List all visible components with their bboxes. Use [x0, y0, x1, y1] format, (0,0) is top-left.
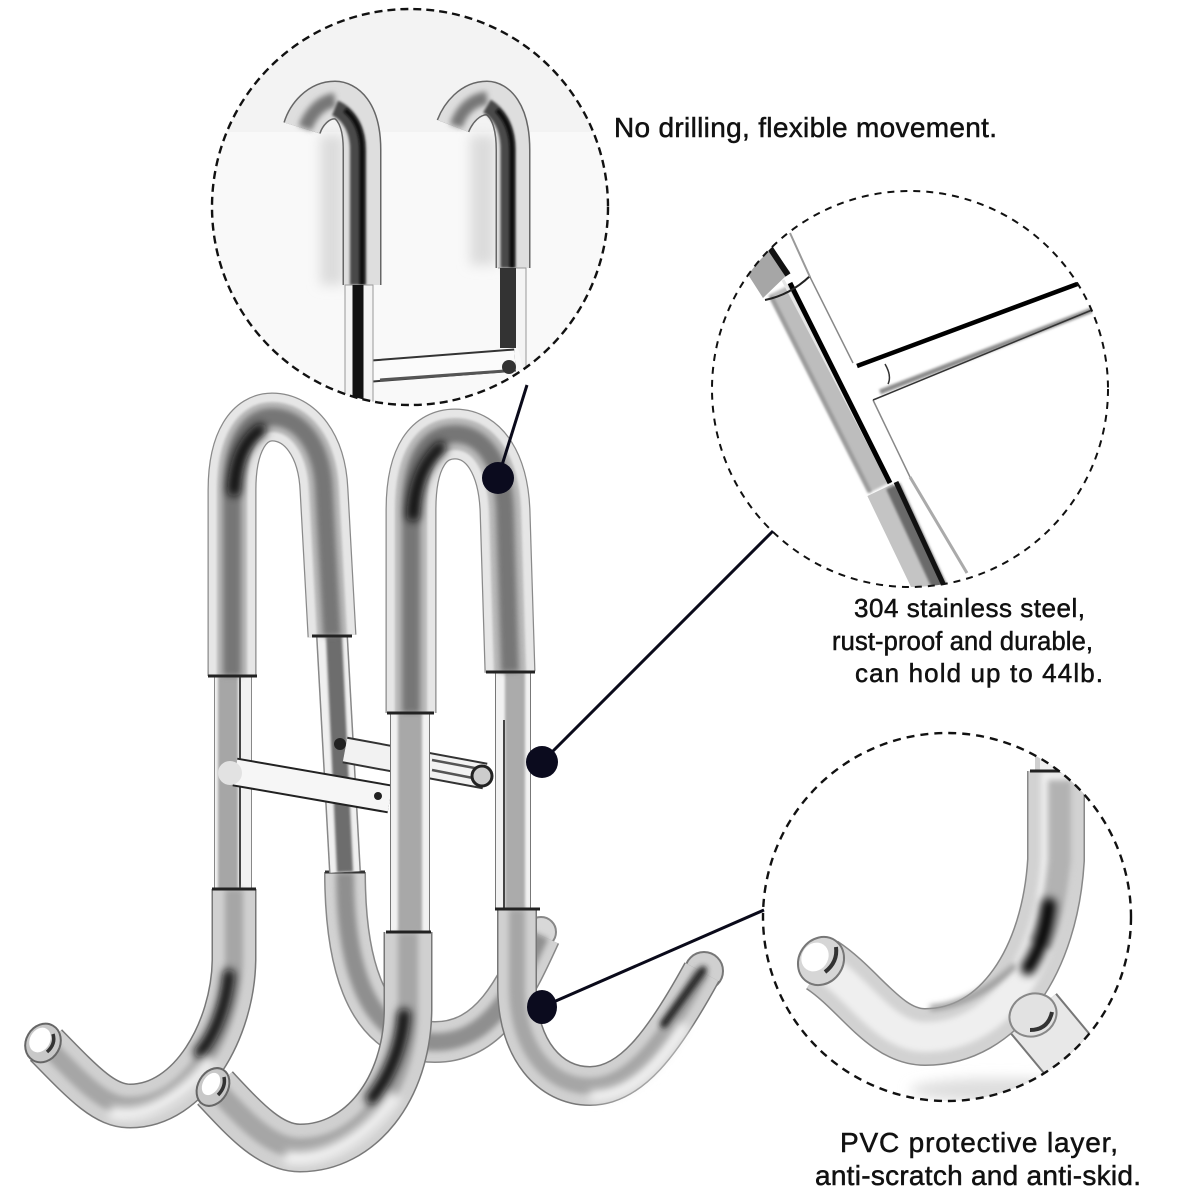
front hook upper sleeve [387, 434, 535, 713]
right hook lower sleeve [495, 909, 723, 1096]
second hook tube in detail [1010, 993, 1090, 1073]
second hook tip in detail [1008, 992, 1058, 1038]
diagonal rod in detail [771, 277, 910, 492]
rear crossbar [334, 738, 492, 786]
text: no drilling: No drilling, flexible movement. [614, 112, 997, 143]
front hook rod [390, 713, 430, 932]
left hook rod [214, 676, 252, 890]
callout: pointer to stainless steel detail [526, 531, 773, 778]
text: stainless steel: rust-proof and durable, [832, 628, 1093, 656]
floor shadow in detail [911, 1074, 1040, 1101]
panel: PVC layer detail [763, 733, 1131, 1108]
text: PVC protective layer [815, 1127, 1141, 1191]
left hook upper sleeve [208, 417, 352, 676]
front crossbar [218, 761, 390, 800]
text: PVC protective layer: PVC protective layer, [840, 1127, 1118, 1158]
side bar in detail [857, 283, 1092, 400]
right clip in detail [453, 98, 526, 380]
hook in detail [789, 771, 1083, 1037]
text: stainless steel [832, 593, 1103, 688]
sleeve in detail [880, 477, 967, 590]
text: stainless steel: 304 stainless steel, [854, 593, 1085, 623]
text: PVC protective layer: anti-scratch and anti-skid. [815, 1160, 1141, 1191]
callout: pointer to PVC layer detail [527, 910, 764, 1024]
panel: stainless steel detail [712, 191, 1108, 590]
back hook lower sleeve [325, 872, 556, 1042]
panel: no drilling detail [200, 0, 620, 420]
left hook lower sleeve and tip [18, 889, 256, 1114]
upper sleeve in detail [747, 233, 810, 300]
crossbar in detail [372, 360, 515, 380]
callout: pointer to no drilling detail [482, 385, 527, 494]
right hook rod [495, 672, 531, 910]
rod in detail [1035, 756, 1054, 770]
left clip in detail [302, 100, 373, 420]
wall and door background [227, 9, 593, 132]
text: stainless steel: can hold up to 44lb. [855, 658, 1103, 688]
front hook lower sleeve [190, 932, 431, 1158]
back hook rod [332, 636, 345, 872]
panel: double hook product [18, 417, 723, 1158]
